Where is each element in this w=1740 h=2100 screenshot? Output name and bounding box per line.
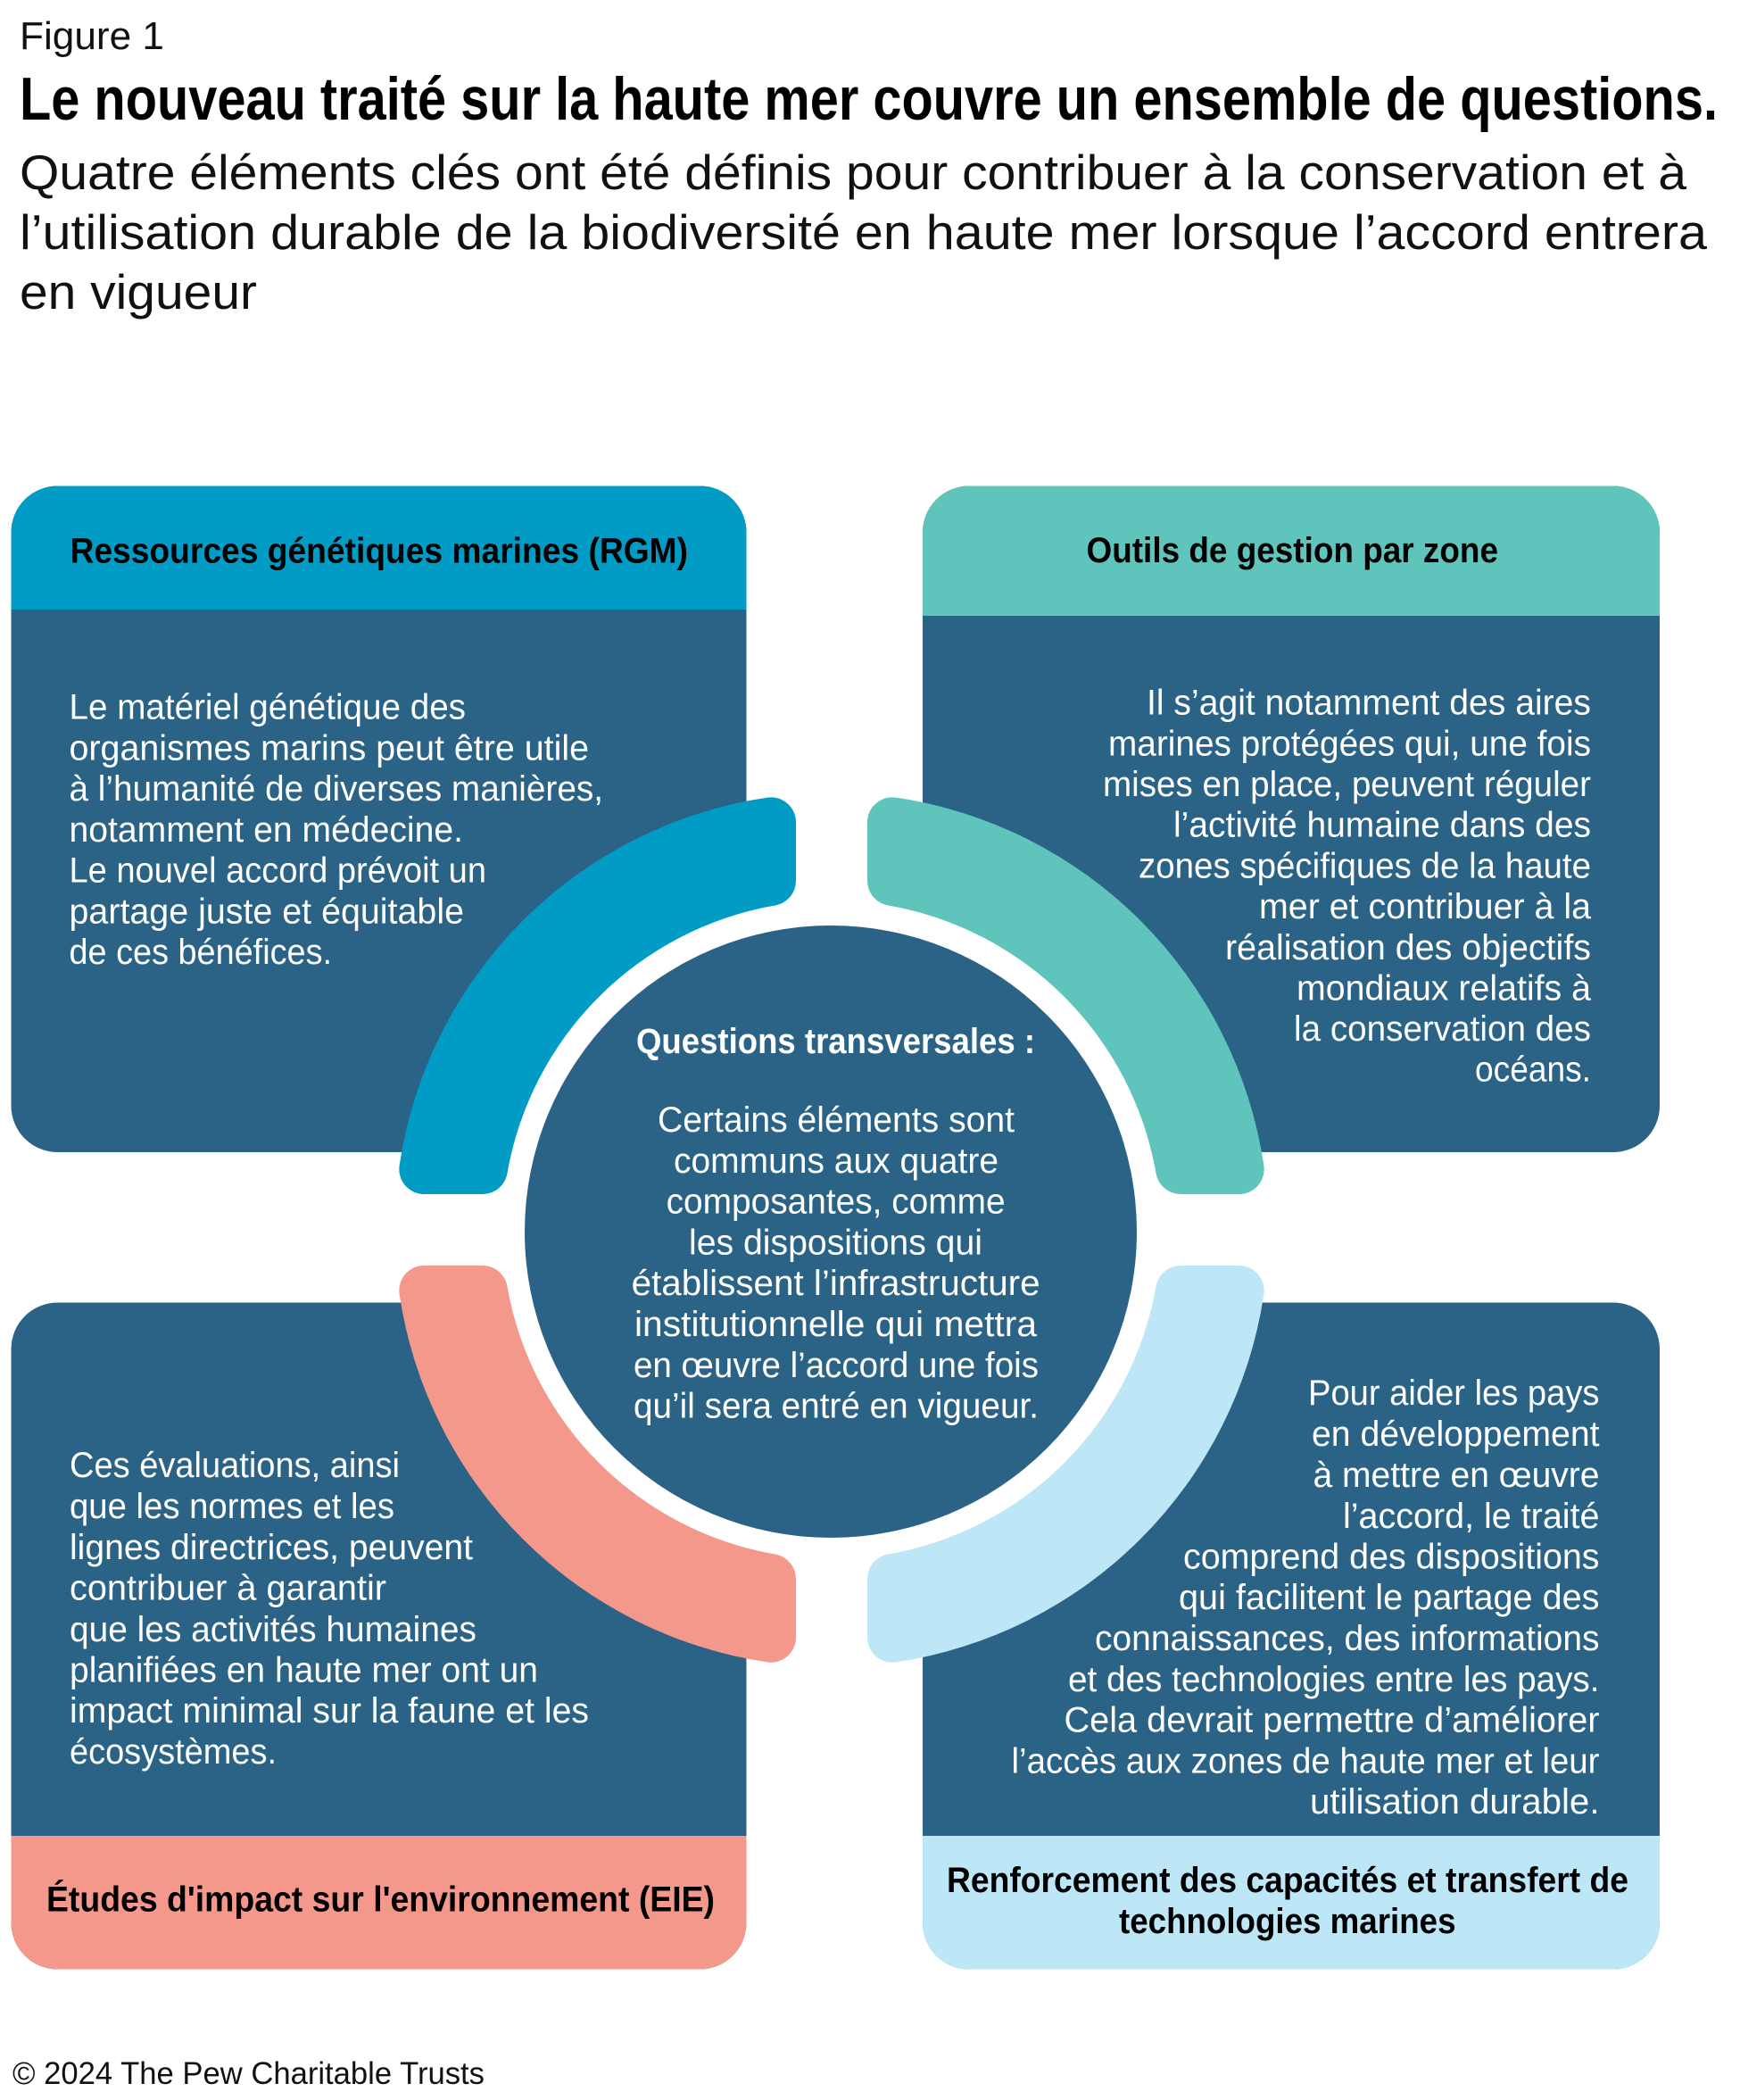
figure label: Figure 1 — [20, 14, 164, 58]
body text: outils: mises en place, peuvent réguler — [1103, 765, 1591, 804]
header band: RGM — [11, 486, 746, 610]
footer text: renforcement: technologies marines — [1119, 1902, 1456, 1941]
body text: RGM: notamment en médecine. — [70, 810, 463, 850]
center body text: en œuvre l’accord une fois — [634, 1346, 1039, 1385]
body text: outils: mer et contribuer à la — [1259, 887, 1592, 926]
center body text: qu’il sera entré en vigueur. — [634, 1387, 1039, 1426]
ring segment: salmon — [399, 1266, 796, 1663]
ring segment: blue — [399, 797, 796, 1194]
footer text: renforcement: Renforcement des capacités et transfert de — [947, 1861, 1628, 1900]
panel: études d'impact sur l'environnement — [11, 1303, 746, 1969]
body text: EIE: planifiées en haute mer ont un — [70, 1650, 538, 1689]
body text: RGM — [70, 687, 603, 972]
subtitle: l’utilisation durable de la biodiversité en haute mer lorsque l’accord entrera — [20, 204, 1707, 260]
body text: RGM: Le matériel génétique des — [70, 687, 466, 726]
footer text: renforcement — [947, 1861, 1628, 1941]
center body text: établissent l’infrastructure — [632, 1264, 1040, 1303]
ring segment: teal — [867, 797, 1264, 1194]
subtitle: en vigueur — [20, 264, 257, 320]
panel: ressources génétiques marines — [11, 486, 746, 1152]
body text: RGM: Le nouvel accord prévoit un — [70, 851, 486, 891]
body text: RGM: partage juste et équitable — [70, 892, 464, 931]
body text: outils: l’activité humaine dans des — [1173, 806, 1591, 845]
header text: outils: Outils de gestion par zone — [1087, 531, 1498, 570]
body text: outils: océans. — [1475, 1050, 1591, 1090]
body text: EIE — [70, 1446, 589, 1772]
body text: renforcement: Pour aider les pays — [1308, 1374, 1599, 1413]
body text: renforcement: en développement — [1312, 1415, 1599, 1454]
header band: outils — [923, 486, 1660, 616]
body text: outils: zones spécifiques de la haute — [1139, 846, 1591, 885]
body text: EIE: lignes directrices, peuvent — [70, 1528, 473, 1567]
subtitle: Quatre éléments clés ont été définis pour contribuer à la conservation et à — [20, 145, 1686, 200]
body text: renforcement — [1012, 1374, 1599, 1822]
center body text — [632, 1100, 1040, 1426]
body text: renforcement: utilisation durable. — [1310, 1782, 1599, 1822]
body text: renforcement: Cela devrait permettre d’améliorer — [1064, 1701, 1599, 1740]
copyright footer: © 2024 The Pew Charitable Trusts — [12, 2056, 485, 2091]
body text: renforcement: et des technologies entre les pays. — [1068, 1660, 1599, 1699]
body text: EIE: contribuer à garantir — [70, 1569, 386, 1608]
body text: EIE: écosystèmes. — [70, 1732, 277, 1772]
body text: outils: marines protégées qui, une fois — [1108, 724, 1591, 763]
body text: outils — [1103, 684, 1592, 1090]
body text: renforcement: l’accès aux zones de haute mer et leur — [1012, 1741, 1599, 1780]
body text: EIE: impact minimal sur la faune et les — [70, 1691, 589, 1731]
center body text: communs aux quatre — [674, 1141, 998, 1181]
body text: outils: mondiaux relatifs à — [1297, 968, 1592, 1008]
white disk behind ring — [497, 895, 1166, 1565]
center body text: institutionnelle qui mettra — [634, 1305, 1038, 1344]
body text: outils: réalisation des objectifs — [1225, 928, 1591, 967]
body text: EIE: que les normes et les — [70, 1487, 394, 1526]
center body text: Certains éléments sont — [658, 1100, 1015, 1140]
body text: renforcement: connaissances, des informations — [1095, 1619, 1599, 1658]
header text: RGM: Ressources génétiques marines (RGM) — [70, 532, 688, 571]
center circle: questions transversales — [525, 925, 1137, 1538]
body text: renforcement: comprend des dispositions — [1183, 1538, 1599, 1577]
body text: renforcement: à mettre en œuvre — [1313, 1456, 1599, 1495]
body text: outils: la conservation des — [1294, 1009, 1591, 1049]
panel: outils de gestion par zone — [923, 486, 1660, 1152]
center body text: les dispositions qui — [689, 1223, 982, 1262]
center body text: composantes, comme — [667, 1183, 1006, 1222]
center heading: Questions transversales : — [636, 1022, 1035, 1061]
body text: renforcement: l’accord, le traité — [1343, 1497, 1599, 1536]
ring segment: light blue — [867, 1266, 1264, 1663]
body text: EIE: que les activités humaines — [70, 1610, 476, 1649]
body text: EIE: Ces évaluations, ainsi — [70, 1446, 400, 1485]
subtitle — [20, 145, 1707, 320]
panel: renforcement des capacités — [923, 1303, 1660, 1969]
footer band: EIE — [11, 1836, 746, 1969]
footer text: EIE: Études d'impact sur l'environnement (EIE) — [46, 1880, 715, 1919]
body text: outils: Il s’agit notamment des aires — [1147, 684, 1591, 723]
body text: RGM: organismes marins peut être utile — [70, 728, 589, 768]
body text: RGM: de ces bénéfices. — [70, 933, 332, 972]
body text: RGM: à l’humanité de diverses manières, — [70, 769, 603, 809]
footer band: renforcement — [923, 1836, 1660, 1969]
body text: renforcement: qui facilitent le partage des — [1179, 1578, 1599, 1617]
